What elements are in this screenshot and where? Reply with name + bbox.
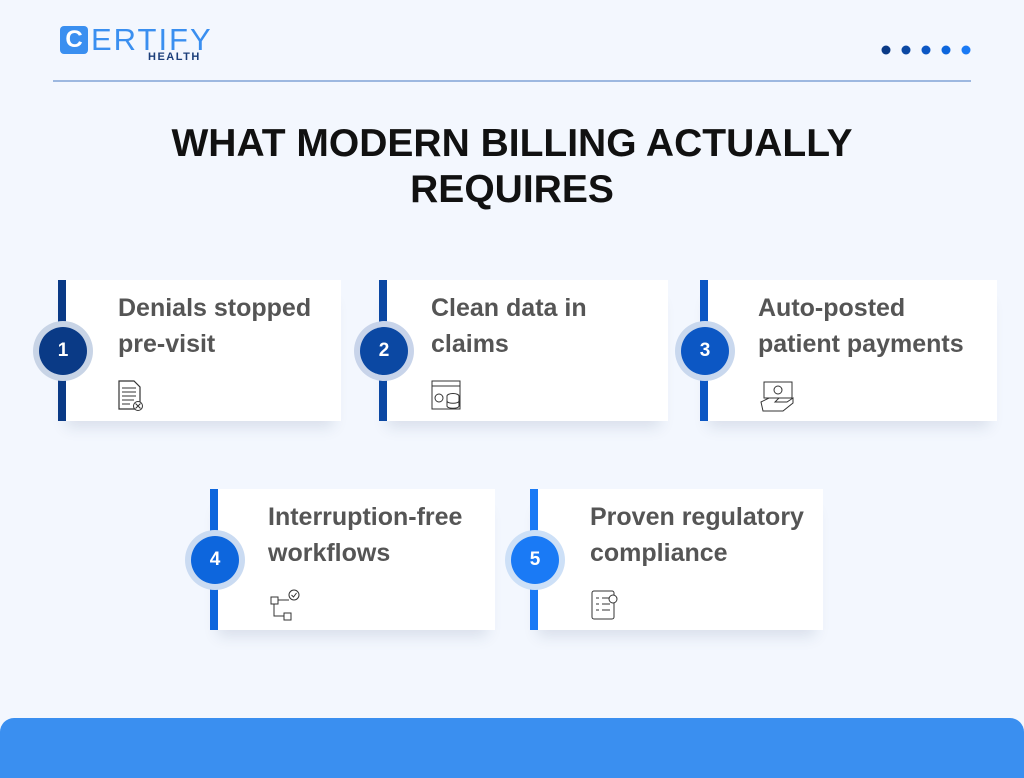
logo bbox=[60, 22, 213, 63]
icon: cash hand bbox=[760, 382, 794, 412]
icon: workflow bbox=[270, 590, 300, 620]
icon: database bbox=[432, 380, 460, 410]
icon: document x bbox=[118, 380, 143, 411]
card 4: Interruption-free bbox=[268, 503, 462, 531]
card 4 bbox=[210, 489, 495, 630]
card 3: Auto-posted bbox=[758, 294, 905, 322]
title bbox=[172, 122, 852, 211]
footer band bbox=[0, 718, 1024, 778]
title: WHAT MODERN BILLING ACTUALLY bbox=[172, 122, 852, 165]
icon: checklist bbox=[592, 590, 618, 620]
card 1: Denials stopped bbox=[118, 294, 311, 322]
logo: HEALTH bbox=[148, 51, 201, 63]
title: REQUIRES bbox=[410, 168, 614, 211]
card 2: claims bbox=[431, 330, 509, 358]
card 1 bbox=[58, 280, 341, 421]
card 5 bbox=[530, 489, 823, 630]
card 2: Clean data in bbox=[431, 294, 587, 322]
logo: ERTIFY bbox=[91, 22, 213, 57]
card 2 bbox=[379, 280, 668, 421]
dots bbox=[882, 46, 970, 54]
card 1: pre-visit bbox=[118, 330, 215, 358]
card 3: 3 bbox=[700, 340, 710, 361]
card 1: 1 bbox=[58, 340, 68, 361]
card 3 bbox=[700, 280, 997, 421]
card 5: compliance bbox=[590, 539, 728, 567]
logo: C bbox=[65, 26, 83, 53]
card 4: 4 bbox=[210, 549, 220, 570]
card 3: patient payments bbox=[758, 330, 964, 358]
card 5: Proven regulatory bbox=[590, 503, 804, 531]
card 4: workflows bbox=[268, 539, 390, 567]
card 2: 2 bbox=[379, 340, 389, 361]
card 5: 5 bbox=[530, 549, 540, 570]
